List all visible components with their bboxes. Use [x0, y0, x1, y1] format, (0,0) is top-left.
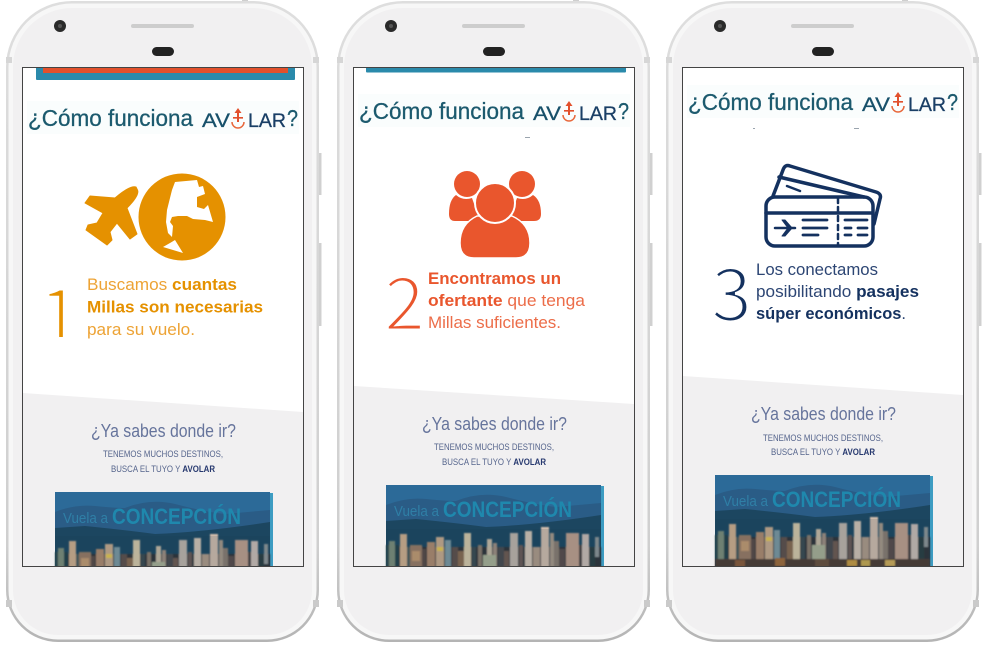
title	[360, 101, 628, 123]
title: LAR	[248, 111, 286, 132]
section heading: ¿Ya sabes donde ir?	[751, 404, 896, 424]
phone 3 screen	[683, 67, 963, 571]
step 3 text: súper económicos.	[756, 304, 906, 323]
step number 2: 2	[384, 245, 425, 352]
phone 3: step three	[666, 0, 982, 642]
phone 3 body	[666, 0, 982, 642]
step 2 text: Encontramos un	[428, 269, 561, 288]
title: LAR	[908, 95, 946, 116]
section subtext: TENEMOS MUCHOS DESTINOS,	[763, 433, 883, 444]
section subtext: TENEMOS MUCHOS DESTINOS,	[434, 442, 554, 453]
photo caption: Vuela a	[63, 510, 109, 527]
phone 3 screen border	[682, 68, 964, 566]
phone 2 screen border	[354, 68, 634, 566]
grey section background	[683, 376, 963, 566]
section heading: ¿Ya sabes donde ir?	[91, 421, 236, 441]
photo caption: Vuela a	[723, 493, 769, 510]
title: AV	[533, 104, 561, 125]
photo caption: CONCEPCIÓN	[772, 487, 901, 512]
title: AV	[862, 95, 890, 116]
step 1 text: Millas son necesarias	[87, 298, 263, 316]
title: ¿Cómo funciona	[28, 105, 193, 131]
title: ¿Cómo funciona	[688, 89, 853, 115]
step 1 text: Buscamos cuantas	[87, 275, 237, 294]
photo caption	[63, 504, 240, 524]
icon: globe	[138, 174, 226, 260]
section subtext: BUSCA EL TUYO Y AVOLAR	[442, 457, 546, 468]
title: AV	[202, 111, 230, 132]
step number 3: 3	[711, 236, 752, 343]
phone 2 body	[337, 0, 652, 642]
icon: plane	[85, 187, 138, 245]
grey section background	[354, 386, 634, 566]
step 2 text: ofertante que tenga	[428, 291, 586, 310]
phone 1 screen	[23, 67, 303, 588]
photo caption: CONCEPCIÓN	[443, 497, 572, 522]
destination photo: Concepción	[54, 492, 273, 566]
icon: group of people	[449, 171, 541, 258]
title: ?	[287, 105, 298, 131]
section subtext	[434, 444, 554, 465]
section heading: ¿Ya sabes donde ir?	[422, 414, 567, 434]
photo caption: Vuela a	[394, 503, 440, 520]
step 1 text	[87, 275, 263, 339]
step 3 text: posibilitando pasajes	[756, 282, 919, 301]
top banner	[36, 67, 295, 80]
step number 1: 1	[39, 257, 80, 364]
title	[689, 92, 958, 114]
photo caption	[394, 497, 571, 517]
destination photo: Concepción	[715, 475, 933, 571]
grey section background	[23, 393, 303, 566]
section subtext: BUSCA EL TUYO Y AVOLAR	[111, 464, 215, 475]
step 2 text: Millas suficientes.	[428, 313, 561, 332]
photo caption: CONCEPCIÓN	[112, 504, 241, 529]
title	[29, 108, 298, 130]
title: ?	[618, 98, 629, 124]
phone 1 screen border	[22, 68, 304, 566]
phone 2 screen	[354, 67, 634, 581]
step 2 text	[428, 272, 585, 328]
phone 1 body	[6, 0, 322, 642]
photo caption	[723, 487, 900, 507]
top banner	[366, 68, 626, 72]
section subtext	[103, 450, 222, 472]
step 3 text	[756, 260, 919, 323]
section subtext	[763, 434, 882, 455]
section subtext: BUSCA EL TUYO Y AVOLAR	[771, 447, 875, 458]
destination photo: Concepción	[384, 485, 604, 566]
phone 1: step one	[6, 0, 322, 642]
title: ¿Cómo funciona	[359, 98, 524, 124]
phone 2: step two	[337, 0, 652, 642]
icon: plane tickets	[766, 166, 880, 246]
title: ?	[947, 89, 958, 115]
section subtext: TENEMOS MUCHOS DESTINOS,	[103, 449, 223, 460]
step 1 text: para su vuelo.	[87, 320, 195, 339]
title: LAR	[579, 104, 617, 125]
step 3 text: Los conectamos	[756, 260, 878, 279]
